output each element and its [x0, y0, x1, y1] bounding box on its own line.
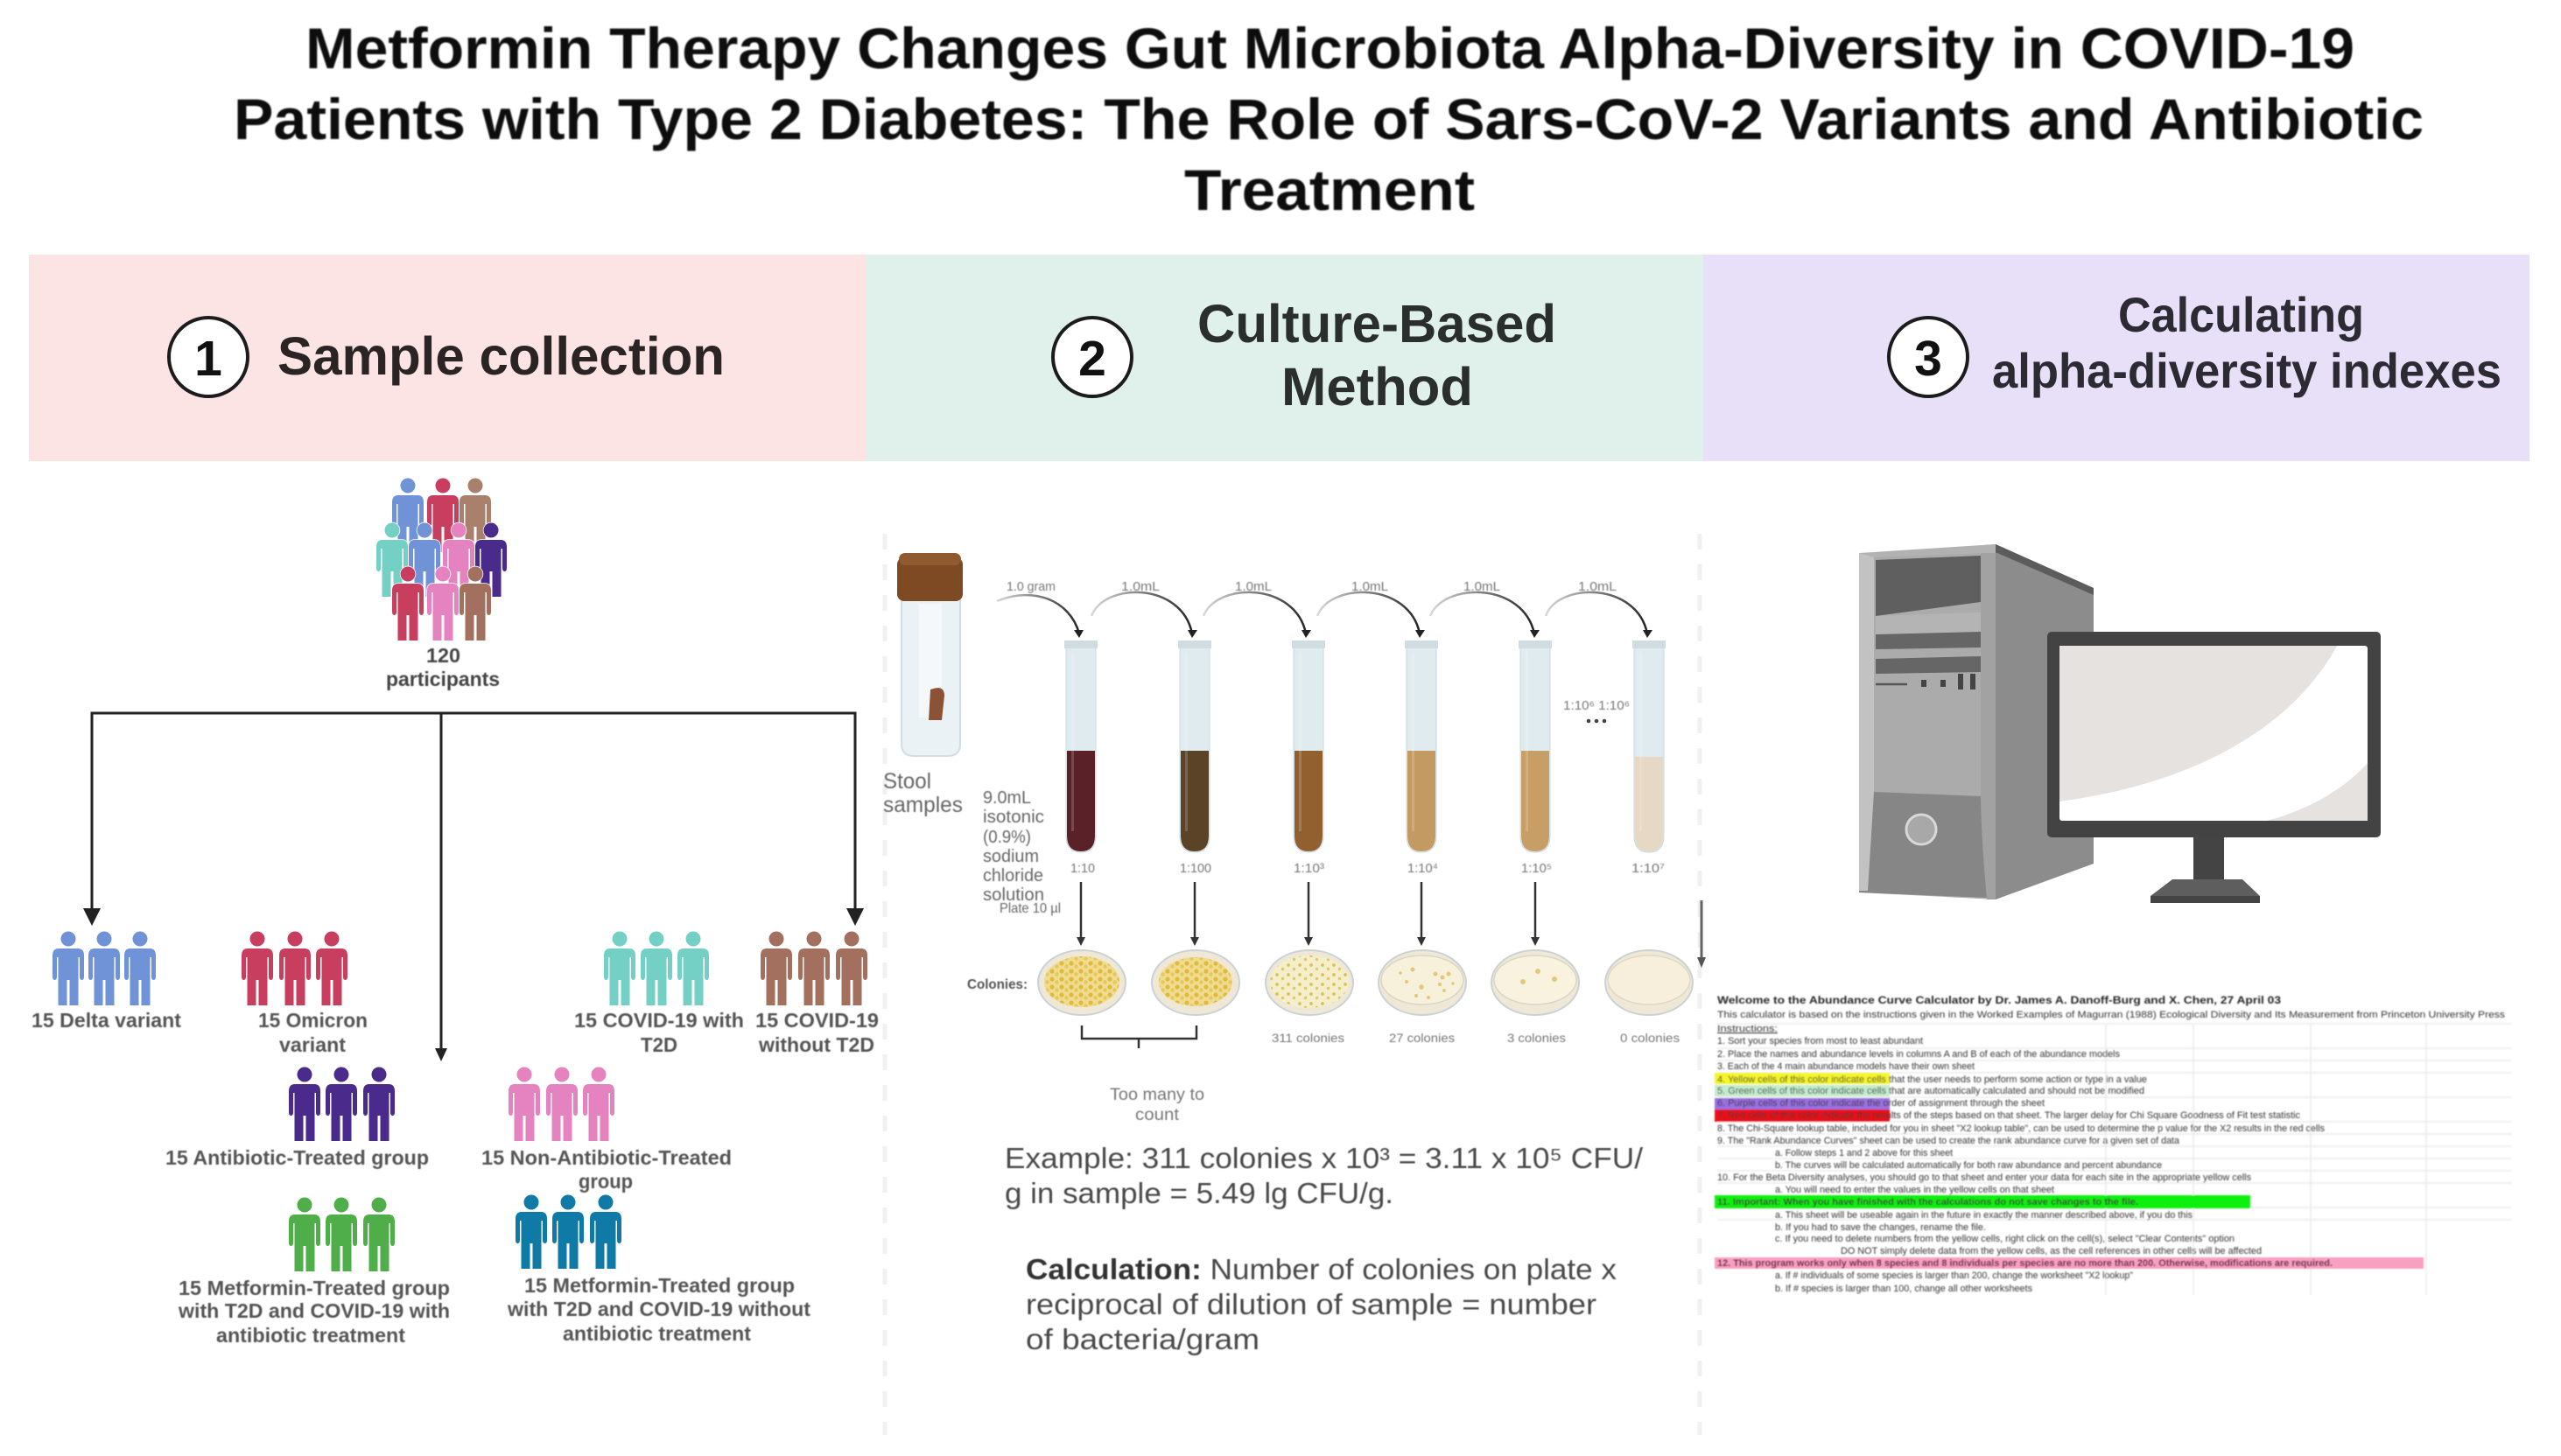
group: 15 Antibiotic-Treated: 15 Antibiotic-Treated group — [165, 1146, 429, 1169]
transfer arcs with volumes: 1.0mL — [1121, 579, 1160, 594]
spreadsheet screenshot of instructions: 4. Yellow cells of this color indicate cells that the user needs to perform some action or type in a value — [1717, 1074, 2147, 1085]
title: Metformin Therapy Changes Gut Microbiota Alpha-Diversity in COVID-19 — [305, 16, 2354, 80]
stool samples label: samples — [883, 793, 963, 817]
group: 15 COVID-19 with T2D: T2D — [641, 1033, 677, 1056]
colony count labels: 3 colonies — [1507, 1031, 1566, 1045]
ellipsis between dilutions — [1587, 719, 1606, 723]
group: 15 COVID-19 without T2D: 15 COVID-19 — [755, 1009, 879, 1032]
group: metformin with antibiotic treatment: 15 Metformin-Treated group — [179, 1277, 450, 1299]
transfer arcs with volumes: 1.0mL — [1463, 579, 1500, 594]
spreadsheet screenshot of instructions: b. If you had to save the changes, rename the file. — [1775, 1222, 1986, 1233]
spreadsheet screenshot of instructions: a. You will need to enter the values in the yellow cells on that sheet — [1775, 1185, 2054, 1195]
panel header: calculating alpha-diversity indexes: alpha-diversity indexes — [1992, 343, 2501, 398]
panel header: culture-based method: Method — [1281, 357, 1473, 416]
participants label — [386, 644, 500, 690]
spreadsheet screenshot of instructions: 10. For the Beta Diversity analyses, you should go to that sheet and enter your data for each site in the appropriate yellow cells — [1717, 1172, 2251, 1183]
group: 15 COVID-19 with T2D — [574, 931, 744, 1056]
spreadsheet screenshot of instructions: Welcome to the Abundance Curve Calculator by Dr. James A. Danoff-Burg and X. Chen, 27 April 03 — [1717, 994, 2281, 1006]
spreadsheet screenshot of instructions: 3. Each of the 4 main abundance models have their own sheet — [1717, 1061, 1975, 1072]
group: metformin with antibiotic treatment — [178, 1197, 450, 1347]
group: metformin with antibiotic treatment: with T2D and COVID-19 with — [178, 1299, 450, 1322]
example calculation text: Example: 311 colonies x 10³ = 3.11 x 10⁵ CFU/ — [1005, 1142, 1644, 1174]
dilution labels: 1:10⁴ — [1407, 861, 1438, 876]
panel header: culture-based method — [867, 255, 1703, 461]
tree arrows from participants to groups — [83, 713, 864, 1061]
calculation formula text — [1026, 1253, 1617, 1355]
spreadsheet screenshot of instructions: a. If # individuals of some species is larger than 200, change the worksheet "X2 lookup" — [1775, 1270, 2133, 1281]
colonies label: Colonies: — [967, 977, 1028, 992]
spreadsheet screenshot of instructions: 2. Place the names and abundance levels in columns A and B of each of the abundance models — [1717, 1049, 2120, 1060]
spreadsheet screenshot of instructions: This calculator is based on the instructions given in the Worked Examples of Magurran (1988) Ecological Diversity and Its Measurement from Princeton University Press — [1717, 1010, 2506, 1020]
group: 15 COVID-19 without T2D: without T2D — [758, 1033, 874, 1056]
dilution labels: 1:10 — [1070, 861, 1095, 876]
too many to count bracket: Too many to — [1110, 1086, 1204, 1104]
group: 15 Omicron variant: 15 Omicron — [258, 1009, 368, 1032]
dilution labels: 1:10⁷ — [1631, 861, 1665, 876]
participants label: participants — [386, 668, 500, 690]
spreadsheet screenshot of instructions: Instructions: — [1717, 1024, 1778, 1034]
transfer arcs with volumes: 1.0mL — [1578, 579, 1617, 594]
panel header: sample collection: 1 — [194, 331, 222, 387]
group: metformin with antibiotic treatment: antibiotic treatment — [216, 1324, 405, 1347]
icon: monitor — [2047, 632, 2381, 903]
spreadsheet screenshot of instructions: 11. Important: When you have finished with the calculations do not save changes to the file. — [1717, 1197, 2138, 1208]
test tubes dilution series — [1064, 640, 1666, 852]
group: metformin without antibiotic treatment: 15 Metformin-Treated group — [524, 1274, 795, 1297]
title: Treatment — [1184, 158, 1475, 222]
spreadsheet screenshot of instructions — [1715, 994, 2512, 1295]
spreadsheet screenshot of instructions: 9. The "Rank Abundance Curves" sheet can be used to create the rank abundance curve for a given set of data — [1717, 1136, 2180, 1146]
group: metformin without antibiotic treatment: with T2D and COVID-19 without — [507, 1298, 810, 1320]
isotonic solution label: (0.9%) — [983, 828, 1031, 847]
group: 15 COVID-19 with T2D: 15 COVID-19 with — [574, 1009, 744, 1032]
too many to count bracket: count — [1135, 1106, 1180, 1124]
dilution labels: 1:10⁶ 1:10⁶ — [1563, 698, 1630, 713]
isotonic solution label: 9.0mL — [983, 788, 1031, 808]
group: 15 Omicron variant — [242, 931, 368, 1056]
isotonic solution label: sodium — [983, 847, 1039, 866]
group: 15 Antibiotic-Treated — [165, 1068, 429, 1169]
group: 15 Non-Antibiotic-Treated: group — [579, 1170, 633, 1193]
isotonic solution label: Plate 10 µl — [1000, 901, 1061, 916]
title: Patients with Type 2 Diabetes: The Role of Sars-CoV-2 Variants and Antibiotic — [234, 87, 2424, 151]
spreadsheet screenshot of instructions: DO NOT simply delete data from the yellow cells, as the cell references in other cells will be affected — [1841, 1246, 2262, 1256]
transfer arcs with volumes: 1.0mL — [1351, 579, 1388, 594]
spreadsheet screenshot of instructions: 6. Purple cells of this color indicate the order of assignment through the sheet — [1717, 1098, 2045, 1109]
dilution labels: 1:10⁵ — [1521, 861, 1552, 876]
group: 15 Delta variant — [32, 931, 181, 1032]
isotonic solution label: chloride — [983, 866, 1043, 886]
group: 15 Omicron variant: variant — [279, 1033, 346, 1056]
panel header: calculating alpha-diversity indexes: 3 — [1914, 331, 1942, 387]
isotonic solution label: isotonic — [983, 808, 1044, 827]
dilution labels: 1:10³ — [1294, 861, 1324, 876]
agar plates with colonies — [1038, 950, 1693, 1015]
spreadsheet screenshot of instructions: a. Follow steps 1 and 2 above for this sheet — [1775, 1148, 1953, 1158]
isotonic solution label — [983, 788, 1061, 916]
column dividers — [885, 534, 1700, 1435]
panel header: calculating alpha-diversity indexes — [1703, 255, 2529, 461]
group: metformin without antibiotic treatment — [507, 1195, 810, 1345]
transfer arcs with volumes: 1.0mL — [1235, 579, 1272, 594]
colony count labels — [1272, 1031, 1680, 1045]
spreadsheet screenshot of instructions: a. This sheet will be useable again in the future in exactly the manner described above, if you do this — [1775, 1210, 2193, 1221]
example calculation text — [1005, 1142, 1644, 1209]
spreadsheet screenshot of instructions: 8. The Chi-Square lookup table, included for you in sheet "X2 lookup table", can be used to determine the p value for the X2 results in the red cells — [1717, 1124, 2325, 1134]
colony count labels: 311 colonies — [1272, 1031, 1344, 1045]
dilution labels: 1:100 — [1180, 861, 1211, 876]
group: metformin without antibiotic treatment: antibiotic treatment — [563, 1322, 751, 1345]
spreadsheet screenshot of instructions: 7. Red cells of this color indicate the results of the steps based on that sheet. The larger delay for Chi Square Goodness of Fit test statistic — [1717, 1110, 2300, 1121]
panel header: sample collection — [29, 255, 867, 461]
stool samples label: Stool — [883, 769, 931, 794]
stool samples label — [883, 769, 963, 817]
too many to count bracket — [1082, 1026, 1204, 1124]
icon: computer tower — [1859, 544, 2094, 900]
panel header: sample collection: Sample collection — [277, 326, 725, 386]
calculation formula text: of bacteria/gram — [1026, 1323, 1259, 1355]
group: 15 Delta variant: 15 Delta variant — [32, 1009, 181, 1032]
transfer arcs with volumes: 1.0 gram — [1007, 579, 1056, 594]
group: 15 COVID-19 without T2D — [755, 931, 879, 1056]
isotonic solution label: solution — [983, 886, 1044, 905]
plating arrows — [1077, 882, 1706, 968]
panel header: culture-based method: 2 — [1078, 331, 1106, 387]
participants crowd icon — [376, 478, 507, 640]
panel header: culture-based method: Culture-Based — [1197, 294, 1556, 354]
group: 15 Non-Antibiotic-Treated: 15 Non-Antibiotic-Treated — [481, 1146, 732, 1169]
group: 15 Non-Antibiotic-Treated — [481, 1068, 732, 1193]
calculation formula text: Calculation: Number of colonies on plate x — [1026, 1253, 1617, 1285]
spreadsheet screenshot of instructions: c. If you need to delete numbers from the yellow cells, right click on the cell(s), select "Clear Contents" option — [1775, 1234, 2235, 1244]
participants label: 120 — [426, 644, 460, 667]
spreadsheet screenshot of instructions: 1. Sort your species from most to least abundant — [1717, 1036, 1923, 1046]
icon: stool sample vial — [897, 553, 963, 756]
title — [234, 16, 2424, 222]
example calculation text: g in sample = 5.49 lg CFU/g. — [1005, 1177, 1393, 1209]
transfer arcs with volumes — [997, 579, 1652, 638]
spreadsheet screenshot of instructions: b. If # species is larger than 100, change all other worksheets — [1775, 1284, 2032, 1294]
spreadsheet screenshot of instructions: 12. This program works only when 8 species and 8 individuals per species are no more than 200. Otherwise, modifications are required. — [1717, 1258, 2333, 1269]
colony count labels: 0 colonies — [1620, 1031, 1680, 1045]
dilution labels — [1070, 698, 1665, 876]
spreadsheet screenshot of instructions: b. The curves will be calculated automatically for both raw abundance and percent abundance — [1775, 1160, 2162, 1171]
calculation formula text: reciprocal of dilution of sample = number — [1026, 1288, 1596, 1320]
panel header: calculating alpha-diversity indexes: Calculating — [2118, 287, 2364, 342]
colony count labels: 27 colonies — [1389, 1031, 1455, 1045]
spreadsheet screenshot of instructions: 5. Green cells of this color indicate cells that are automatically calculated and should not be modified — [1717, 1086, 2144, 1096]
